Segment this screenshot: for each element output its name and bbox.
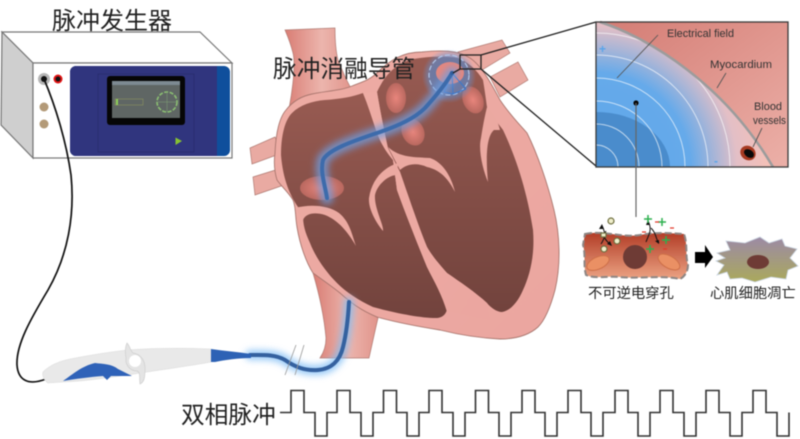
generator top face xyxy=(2,32,232,63)
pulse generator device xyxy=(1,32,232,158)
valves xyxy=(300,83,488,200)
septum xyxy=(363,92,490,320)
screen xyxy=(107,76,185,125)
cell body xyxy=(583,233,688,279)
ions and arrows xyxy=(599,215,674,253)
leader lines xyxy=(617,35,762,147)
label: biphasic pulse: 双相脉冲 xyxy=(181,402,276,429)
biphasic pulse waveform xyxy=(280,390,789,436)
superior vena cava xyxy=(285,28,352,125)
title: ablation catheter: 脉冲消融导管 xyxy=(273,56,415,83)
inset panel: electrical field xyxy=(594,20,790,168)
valve leaflet: tricuspid lower xyxy=(295,206,356,246)
control panel xyxy=(70,66,230,156)
inferior vena cava xyxy=(313,273,378,358)
nucleus xyxy=(623,245,647,269)
label: blood vessels: vessels xyxy=(753,115,786,127)
zoom lines xyxy=(453,22,596,166)
generator side face xyxy=(1,32,33,158)
catheter inside the heart xyxy=(322,71,454,198)
connector: field to cell xyxy=(633,100,639,217)
blood vessel xyxy=(737,143,759,163)
right pulmonary veins xyxy=(458,40,528,97)
play button xyxy=(176,138,182,145)
valve leaflet: tricuspid upper xyxy=(369,163,398,231)
handle ring grip xyxy=(125,343,145,384)
polarity signs: - xyxy=(714,154,718,168)
heart xyxy=(274,51,559,339)
left heart chamber xyxy=(377,57,533,312)
blue strain relief xyxy=(211,349,251,362)
cell with irreversible electroporation xyxy=(583,215,688,279)
sockets xyxy=(38,73,62,128)
catheter outside the heart xyxy=(250,302,349,370)
handle body xyxy=(43,348,211,383)
break marks xyxy=(285,345,304,375)
myocardium boundary xyxy=(600,22,773,167)
valve leaflet: mitral xyxy=(388,147,455,192)
dead myocardial cell xyxy=(716,237,798,282)
right heart chamber xyxy=(281,93,447,318)
title: pulse generator: 脉冲发生器 xyxy=(52,8,172,35)
label: myocardium: Myocardium xyxy=(710,59,772,71)
label: electrical field: Electrical field xyxy=(667,28,734,40)
label: irreversible electroporation: 不可逆电穿孔 xyxy=(588,285,674,302)
mitochondria xyxy=(585,251,682,274)
heart vessels xyxy=(250,28,528,358)
left pulmonary veins xyxy=(250,137,287,195)
ablation ring at pulmonary vein xyxy=(422,49,476,103)
polarity signs: + xyxy=(599,42,606,56)
label: blood vessels xyxy=(753,101,786,127)
generator front face xyxy=(33,63,232,158)
polarity signs xyxy=(599,42,718,168)
zoom source box xyxy=(460,55,481,69)
label: cardiomyocyte death: 心肌细胞凋亡 xyxy=(710,285,796,302)
heart wall xyxy=(274,51,559,339)
label: blood vessels: Blood xyxy=(754,101,782,113)
cable xyxy=(17,79,72,382)
handle blue fin xyxy=(63,363,132,381)
valve leaflet: right xyxy=(480,107,500,182)
arrow: cell to dead cell xyxy=(695,245,713,268)
catheter handle xyxy=(43,343,251,384)
